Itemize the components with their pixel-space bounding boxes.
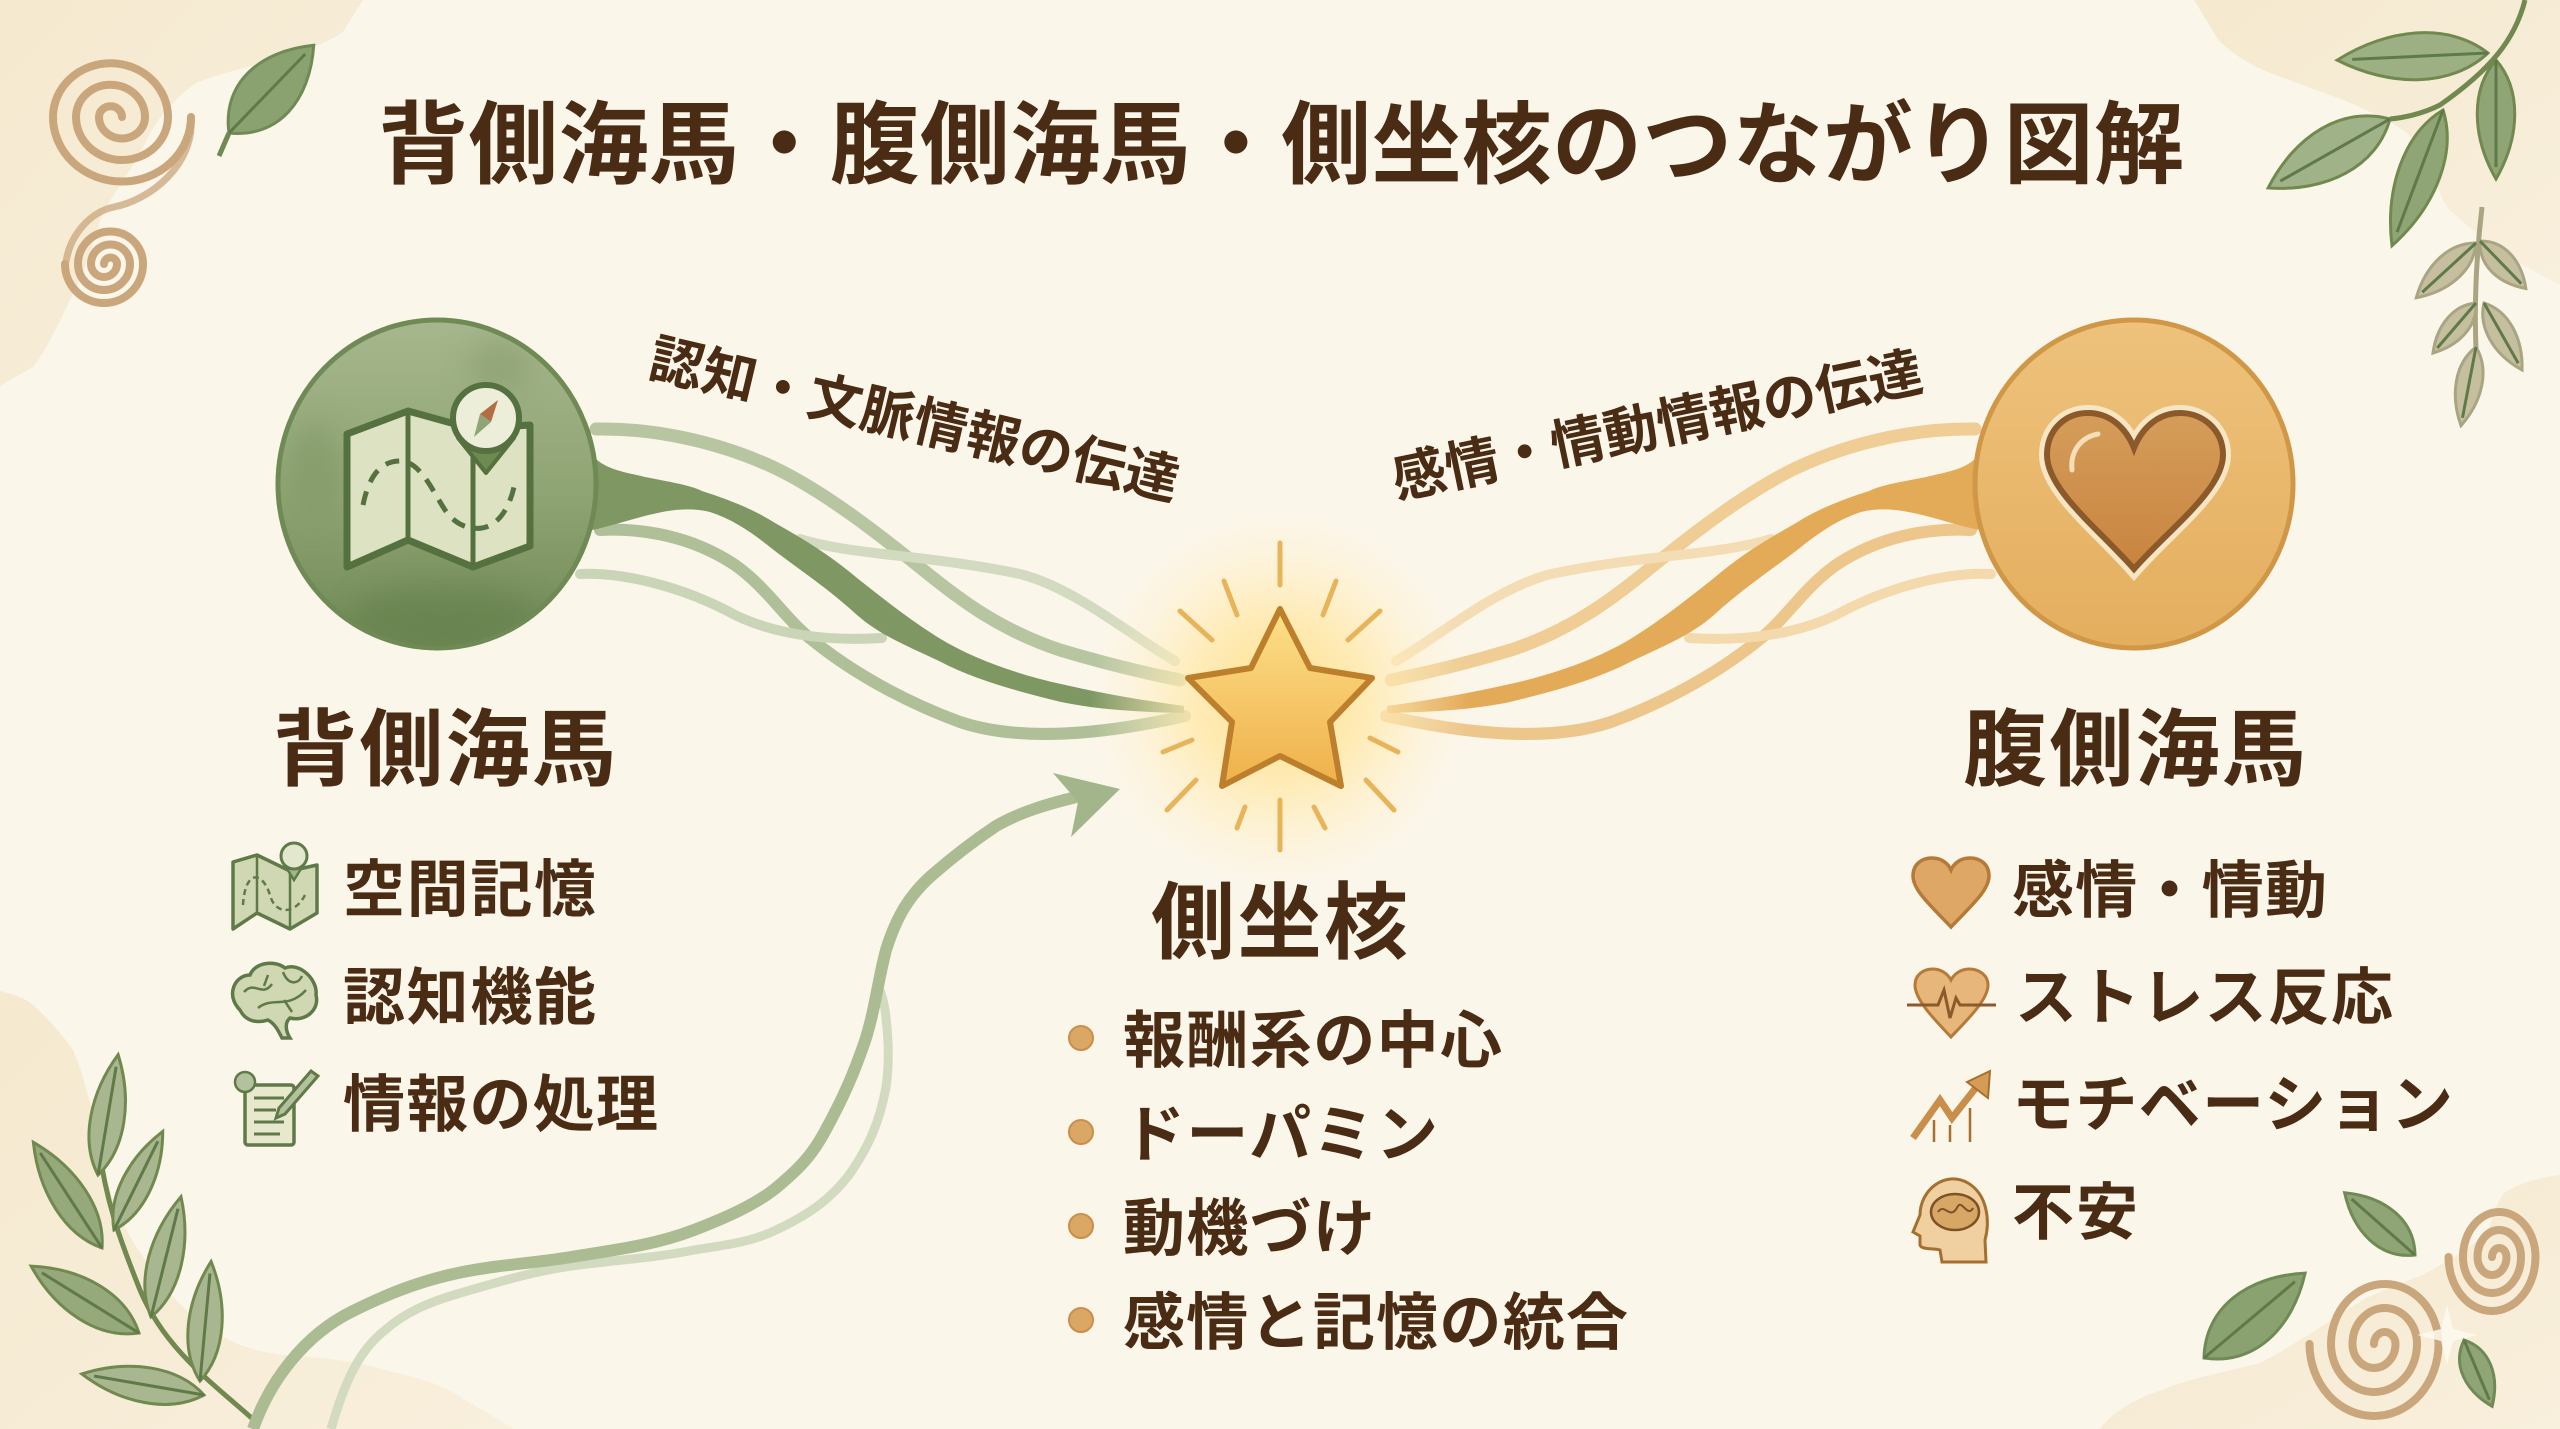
item: motivation: モチベーション	[2012, 1071, 2453, 1140]
icon: compass pin	[453, 385, 519, 473]
decoration: top-left corner	[0, 0, 363, 386]
connection: dorsal hippocampus strands to nucleus accumbens	[580, 429, 1185, 734]
item: stress response: ストレス反応	[2015, 964, 2393, 1033]
icon: folded map	[347, 411, 530, 567]
item: dopamine: ドーパミン	[1123, 1101, 1438, 1170]
label: emotional information: 感情・情動情報の伝達	[1387, 342, 1928, 511]
node: ventral hippocampus circle with heart icon	[1975, 320, 2293, 648]
item: motivation: 動機づけ	[1123, 1195, 1375, 1264]
icon: heart	[2047, 413, 2223, 569]
panel: dorsal hippocampus	[233, 703, 658, 1145]
decoration: top-right corner	[2194, 0, 2560, 428]
item: cognitive function: 認知機能	[343, 964, 596, 1033]
node: star with glow	[1090, 510, 1470, 890]
connection: ventral hippocampus strands to nucleus accumbens	[1386, 429, 1991, 734]
title: 背側海馬・腹側海馬・側坐核のつながり図解	[378, 96, 2184, 196]
panel: nucleus accumbens	[1069, 876, 1628, 1358]
item: reward system: 報酬系の中心	[1123, 1007, 1502, 1076]
heading: 腹側海馬	[1963, 703, 2306, 797]
item: information processing: 情報の処理	[343, 1071, 658, 1140]
heading: 側坐核	[1151, 876, 1408, 970]
label: cognitive information: 認知・文脈情報の伝達	[644, 329, 1185, 512]
panel: ventral hippocampus	[1907, 703, 2453, 1262]
node: dorsal hippocampus circle with map icon	[278, 320, 596, 648]
decoration: bottom-left corner	[0, 991, 514, 1429]
arrow: from lower left to nucleus accumbens	[253, 773, 1120, 1429]
item: cognitive function	[233, 963, 596, 1038]
item: spatial memory	[233, 843, 596, 929]
decoration: bottom-right corner	[2100, 1175, 2560, 1429]
icon: star	[1188, 609, 1372, 786]
item: spatial memory: 空間記憶	[343, 856, 596, 925]
item: anxiety: 不安	[2012, 1179, 2138, 1248]
star rays	[1163, 543, 1398, 850]
item: emotion: 感情・情動	[2012, 857, 2327, 926]
item: integration: 感情と記憶の統合	[1123, 1289, 1628, 1358]
item: anxiety	[1913, 1179, 2138, 1262]
item: information processing	[235, 1071, 658, 1145]
heading: 背側海馬	[273, 703, 616, 797]
